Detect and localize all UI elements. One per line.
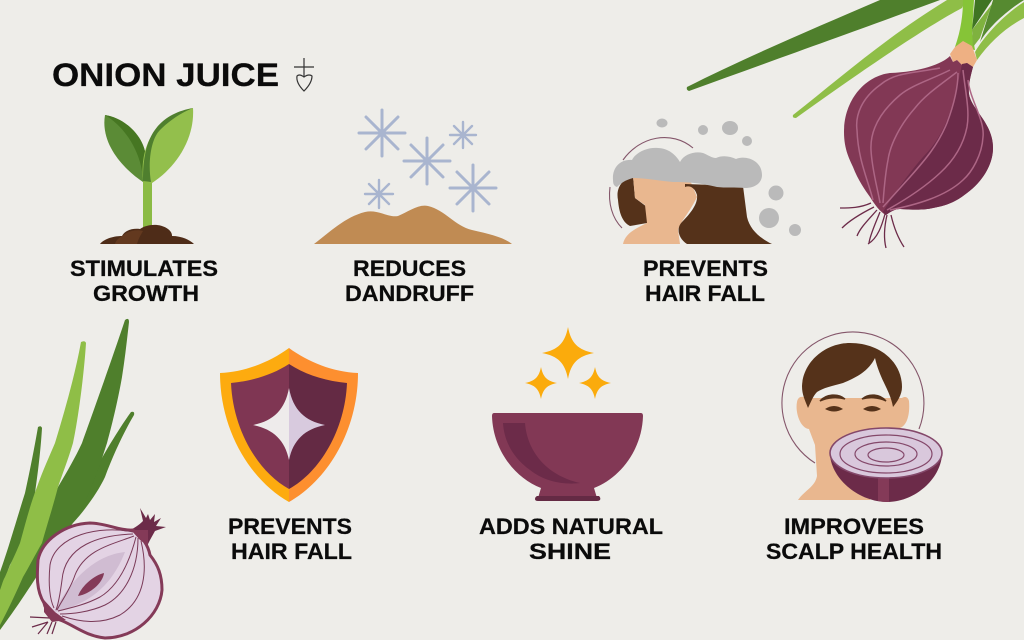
label xyxy=(228,514,352,564)
icon: snowflakes xyxy=(359,110,496,211)
onion body xyxy=(844,56,993,215)
label: HAIR FALL xyxy=(231,539,352,564)
label xyxy=(479,514,663,564)
leaf: stem cluster xyxy=(955,0,975,50)
label xyxy=(643,256,768,306)
panel: reduces dandruff xyxy=(314,110,512,306)
onion shaded side xyxy=(883,63,993,215)
leaf: short dark xyxy=(0,426,42,600)
label: ADDS NATURAL xyxy=(479,514,663,539)
soil mound xyxy=(100,225,194,244)
leaf: light long xyxy=(793,0,966,118)
icon: bowl xyxy=(492,413,643,501)
halved onion xyxy=(830,455,942,502)
icon: title onion drop with cross xyxy=(294,58,314,91)
label xyxy=(345,256,474,306)
label: PREVENTS xyxy=(228,514,352,539)
onion stripes xyxy=(857,68,983,210)
panel: adds natural shine xyxy=(479,327,663,564)
label: SCALP HEALTH xyxy=(766,539,942,564)
panel: stimulates growth xyxy=(70,108,218,306)
label: PREVENTS xyxy=(643,256,768,281)
tuft xyxy=(130,508,166,546)
onion centre xyxy=(54,552,125,612)
title: ONION JUICE xyxy=(52,57,279,93)
roots xyxy=(30,617,56,634)
leaf: tall dark xyxy=(0,319,129,630)
bubbles xyxy=(656,118,801,236)
label: HAIR FALL xyxy=(645,281,765,306)
icon: sprout xyxy=(100,108,194,244)
icon: shield xyxy=(220,348,358,502)
leaf: dark long xyxy=(687,0,940,91)
label: STIMULATES xyxy=(70,256,218,281)
icon: head with foam xyxy=(610,118,801,244)
illustration: cut onion with leaves xyxy=(0,319,166,638)
leaf: light xyxy=(0,341,86,625)
label xyxy=(70,256,218,306)
label: GROWTH xyxy=(93,281,199,306)
label xyxy=(766,514,942,564)
onion roots xyxy=(840,203,904,248)
foam xyxy=(613,148,762,188)
onion neck xyxy=(950,41,977,67)
label: SHINE xyxy=(529,539,611,564)
illustration: whole red onion with leaves xyxy=(687,0,1024,248)
icon: dandruff mound xyxy=(314,206,512,244)
panel: improves scalp health xyxy=(766,332,942,564)
label: DANDRUFF xyxy=(345,281,474,306)
icon: face with halved onion xyxy=(782,332,942,502)
leaf: third dark xyxy=(58,412,134,540)
label: IMPROVEES xyxy=(784,514,924,539)
label: REDUCES xyxy=(353,256,466,281)
onion rings xyxy=(49,530,144,622)
onion cut face xyxy=(37,523,162,638)
icon: sparkles xyxy=(525,327,611,399)
panel: prevents hair fall (bottom) xyxy=(220,348,358,564)
panel: prevents hair fall (top) xyxy=(610,118,801,306)
